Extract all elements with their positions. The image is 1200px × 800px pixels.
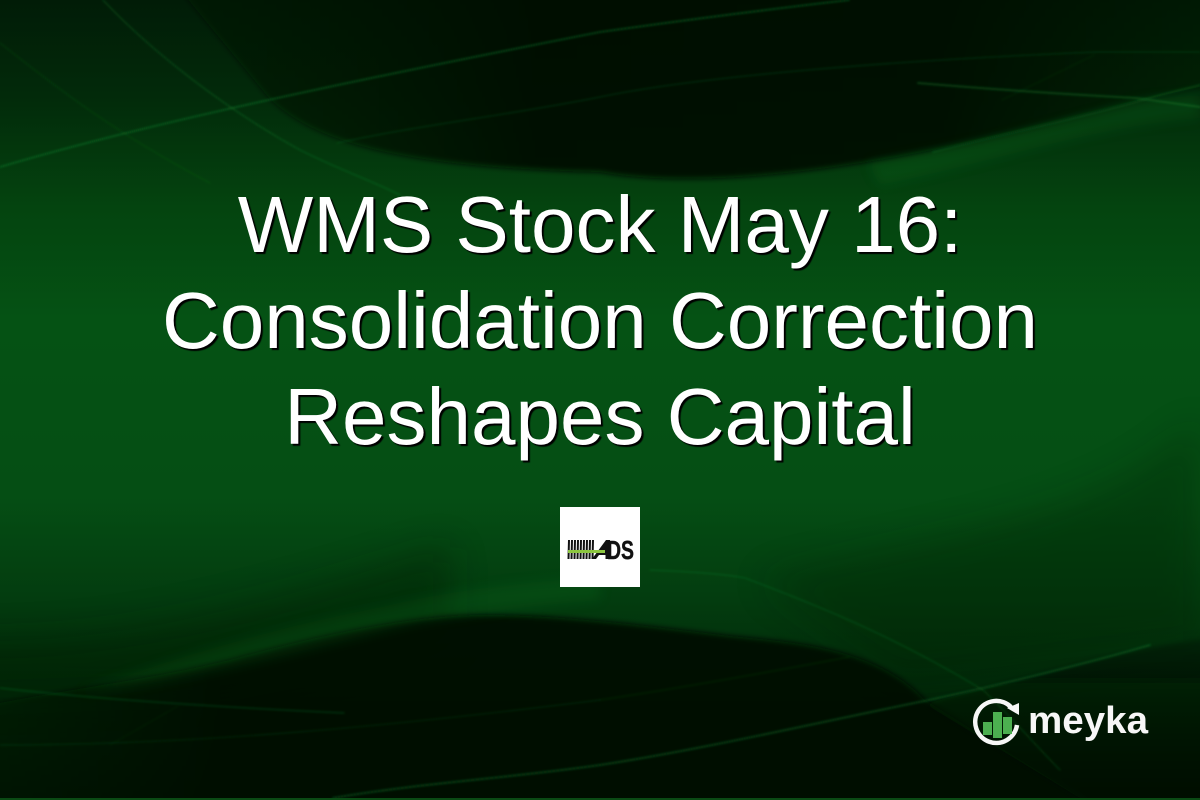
- icon: circular arrow with bars: [975, 701, 1019, 743]
- logo: meyka brand: [972, 698, 1149, 746]
- dark wave shapes: [180, 0, 1200, 179]
- soft shaded areas: [0, 545, 450, 700]
- wordmark: meyka: [1028, 700, 1149, 742]
- icon: ADS company logo: [560, 507, 640, 587]
- title: Reshapes Capital: [284, 372, 916, 461]
- title: WMS Stock May 16:: [238, 180, 962, 269]
- title: [162, 180, 1038, 463]
- bottom edge line: [0, 798, 1200, 800]
- title: Consolidation Correction: [162, 276, 1038, 365]
- bright bands: [868, 95, 1200, 185]
